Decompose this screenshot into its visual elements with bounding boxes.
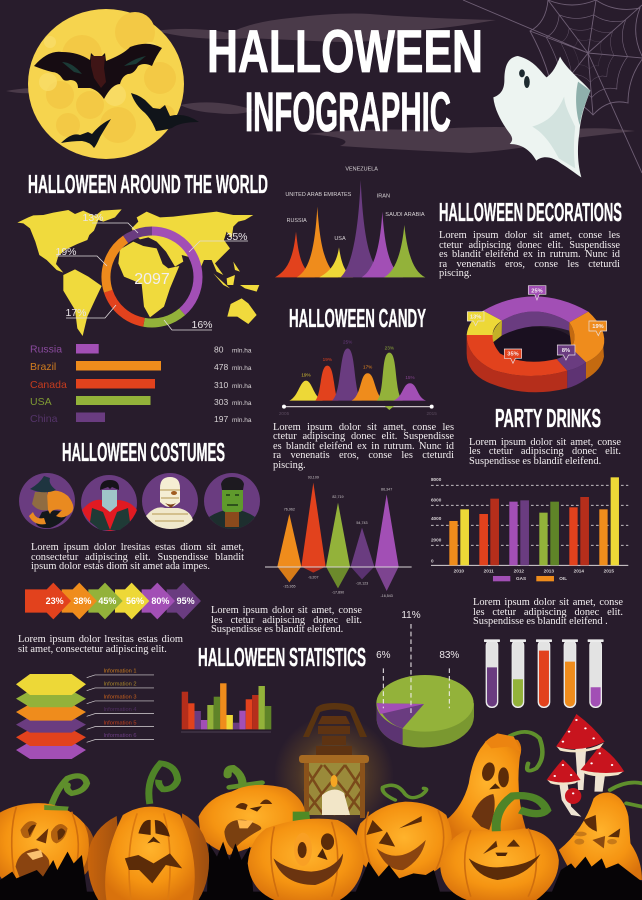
axis labels: 4000 — [431, 516, 442, 521]
icon: vampire — [81, 475, 137, 531]
spider web — [463, 0, 642, 173]
text: decorations: Lorem ipsum dolor sit amet, conse les — [439, 230, 620, 241]
text: candy: ctetur adipiscing donec elit. Suspendisse — [273, 431, 454, 442]
icon: frankenstein — [204, 473, 260, 529]
axis labels: GAS — [516, 576, 526, 581]
country labels: SAUDI ARABIA — [385, 212, 425, 218]
text: ribbon note: Lorem ipsum dolor lresitas estas diom — [18, 634, 183, 645]
text: tubes: Lorem ipsum dolor sit amet, conse — [473, 597, 623, 608]
ribbon percent labels: 80% — [151, 596, 170, 606]
pumpkin: left front — [88, 763, 209, 900]
pumpkin: rear right — [356, 802, 452, 882]
black grass — [0, 842, 642, 900]
diamond values: 76,962 — [284, 507, 295, 511]
row: Canada: Canada — [30, 379, 67, 391]
axis labels: 2013 — [544, 568, 554, 573]
text: costumes: consectetur adipiscing elit. Suspendisse blandit — [31, 552, 244, 562]
background clouds — [6, 14, 635, 153]
row: USA — [30, 396, 252, 408]
value labels — [279, 340, 437, 416]
diamond values — [283, 476, 393, 598]
map — [17, 209, 259, 336]
3D donut chart — [467, 286, 607, 392]
callouts — [467, 286, 607, 363]
row: Brazil: Brazil — [30, 361, 56, 373]
pie labels — [376, 610, 459, 661]
text: decorations: piscing. — [439, 268, 472, 279]
axis labels: OIL — [559, 576, 567, 581]
country labels: IRAN — [377, 193, 390, 199]
ring segments — [87, 212, 217, 342]
text: statistics: Suspendisse es blandit eleifend. — [211, 624, 343, 635]
lantern glow — [274, 715, 394, 835]
axis — [282, 405, 434, 410]
icon: mummy — [142, 473, 198, 529]
title: INFOGRAPHIC — [245, 80, 451, 143]
info labels — [103, 668, 136, 739]
row: USA: mln.ha — [232, 400, 252, 407]
row: China — [30, 412, 252, 425]
diamond values: -10,123 — [356, 581, 368, 585]
pumpkin: right front — [440, 796, 559, 900]
icon: witch — [19, 473, 75, 529]
heading: candy: HALLOWEEN CANDY — [289, 303, 426, 333]
percent labels: 35% — [226, 231, 248, 243]
callouts: 25% — [531, 288, 543, 294]
tube 4 — [562, 639, 578, 708]
axis labels: 2014 — [574, 568, 584, 573]
ribbon percent labels: 95% — [177, 596, 195, 606]
title — [207, 18, 483, 143]
text: candy: piscing. — [273, 460, 306, 470]
row: Canada: 310 — [214, 380, 228, 390]
costume circles — [19, 473, 260, 531]
statistics bars — [181, 683, 271, 732]
text: candy: es blandit eleifend ex in rutrum. Nunc id — [273, 440, 454, 452]
tube 1 — [484, 639, 500, 708]
text: party drinks: Lorem ipsum dolor sit amet, conse — [469, 436, 621, 448]
icon: left small bat — [61, 119, 111, 148]
legend — [493, 576, 554, 581]
bell chart: candy — [279, 340, 437, 416]
row: Russia: Russia — [30, 344, 62, 356]
diamond values: -9,207 — [308, 575, 319, 579]
leader lines — [56, 223, 248, 330]
icon: large bat — [34, 44, 162, 99]
row: Brazil: 478 — [214, 362, 228, 372]
ribbon percent labels: 56% — [126, 596, 145, 606]
pie labels: 83% — [439, 650, 459, 661]
text: statistics: les ctetur adipiscing donec elit. — [211, 614, 362, 626]
3D pie chart — [376, 610, 474, 747]
row: USA: USA — [30, 396, 52, 408]
country bars — [30, 344, 252, 425]
text: candy — [273, 422, 454, 470]
value labels: 25% — [343, 340, 352, 345]
country labels: VENEZUELA — [345, 167, 378, 173]
diamonds chart — [265, 476, 412, 598]
axis labels: 0 — [431, 558, 434, 563]
front pumpkins — [88, 763, 559, 900]
text: party drinks: les ctetur adipiscing donec elit. — [469, 446, 621, 457]
tube 2 — [510, 639, 526, 708]
axis labels: 2015 — [604, 568, 614, 573]
percent labels: 17% — [65, 307, 87, 319]
diamond values: -15,365 — [283, 584, 296, 588]
info labels: Information 5 — [103, 720, 136, 726]
icon: ghost — [493, 56, 590, 177]
country labels: UNITED ARAB EMIRATES — [285, 192, 352, 198]
axis labels: 6000 — [431, 498, 442, 503]
callouts: 13% — [470, 314, 481, 320]
stacked hexagon list — [16, 668, 154, 759]
diamond values: 54,743 — [356, 521, 368, 525]
percent labels: 19% — [55, 246, 77, 258]
value labels: 2015 — [426, 411, 437, 416]
row: Canada: mln.ha — [232, 383, 252, 390]
text: costumes — [31, 542, 244, 572]
text: tubes: les ctetur adipiscing donec elit. — [473, 606, 623, 618]
value labels: 15% — [405, 375, 415, 380]
text: candy: ra venenatis eros, conse les cteturdi — [273, 450, 454, 461]
axis labels: 2012 — [514, 568, 524, 573]
country labels: RUSSIA — [287, 218, 307, 224]
country labels: USA — [334, 236, 346, 242]
row: Canada — [30, 379, 252, 391]
value labels: 19% — [323, 357, 332, 362]
heading: around the world: HALLOWEEN AROUND THE WORLD — [28, 169, 268, 199]
row: China: mln.ha — [232, 417, 252, 424]
pumpkin: centre front — [248, 812, 364, 900]
percent labels: 13% — [82, 212, 104, 224]
callouts: 19% — [592, 324, 604, 330]
moon with bats — [28, 9, 199, 159]
heading: statistics: HALLOWEEN STATISTICS — [198, 642, 366, 672]
text: decorations — [439, 230, 620, 279]
text: decorations: ra venenatis eros, conse les cteturdi — [439, 258, 620, 270]
value labels: 2005 — [279, 411, 290, 416]
pie labels: 11% — [401, 610, 421, 621]
info labels: Information 2 — [103, 681, 136, 687]
row: China: 197 — [214, 414, 228, 424]
diamond values: 82,719 — [332, 495, 344, 499]
row: Russia: 80 — [214, 344, 224, 354]
info lines — [87, 675, 154, 742]
percent labels: 16% — [191, 319, 213, 331]
callouts: 35% — [507, 352, 519, 358]
pumpkin: left — [0, 803, 95, 887]
row: USA: 303 — [214, 397, 228, 407]
candle — [322, 789, 350, 815]
text: costumes: Lorem ipsum dolor lresitas estas diom sit amet, — [31, 542, 244, 553]
peaks chart: countries — [275, 167, 425, 277]
info labels: Information 1 — [103, 668, 136, 674]
axis labels — [431, 477, 614, 581]
ribbon percent labels — [46, 596, 195, 606]
row: Russia: mln.ha — [232, 348, 252, 354]
text: costumes: ipsum dolor estas diom sit amet ada impes. — [31, 561, 210, 572]
ribbon percent labels: 45% — [98, 596, 117, 606]
title: HALLOWEEN — [207, 18, 483, 85]
text: statistics: Lorem ipsum dolor sit amet, conse — [211, 605, 362, 616]
pumpkin: tall gourd — [446, 733, 526, 840]
drinks bar chart — [431, 477, 628, 581]
percent labels — [55, 212, 248, 331]
axis labels: 2010 — [454, 568, 464, 573]
info labels: Information 4 — [103, 707, 136, 713]
text: decorations: ctetur adipiscing donec elit. Suspendisse — [439, 240, 620, 250]
heading: costumes: HALLOWEEN COSTUMES — [62, 437, 225, 467]
test tubes — [484, 639, 604, 708]
diamond values: -16,543 — [380, 594, 393, 598]
axis labels: 2000 — [431, 538, 442, 543]
text: ribbon note: sit amet, consectetur adipiscing elit. — [18, 644, 167, 654]
info labels: Information 3 — [103, 694, 136, 700]
value labels: 19% — [301, 372, 311, 377]
text: party drinks — [469, 436, 621, 466]
ring total: 2097 — [134, 271, 170, 288]
callouts: 8% — [562, 348, 570, 354]
text: ribbon note — [18, 634, 183, 654]
text: tubes: Suspendisse es blandit eleifend . — [473, 616, 608, 627]
mushrooms — [547, 714, 624, 817]
value labels: 17% — [363, 365, 372, 370]
back pumpkins and mushrooms — [0, 714, 642, 887]
row: Russia — [30, 344, 252, 356]
country labels — [285, 167, 425, 242]
text: party drinks: Suspendisse es blandit eleifend. — [469, 456, 601, 466]
vine stems — [51, 732, 642, 807]
diamond values: 93,109 — [308, 476, 319, 480]
value labels: 23% — [385, 345, 394, 350]
icon: right small bat — [131, 93, 199, 131]
tube 5 — [588, 639, 604, 708]
diamond values: -17,890 — [332, 591, 344, 595]
row: Brazil: mln.ha — [232, 365, 252, 372]
ribbon percent labels: 23% — [46, 596, 64, 606]
diamond values: 86,347 — [381, 487, 392, 491]
text: candy: Lorem ipsum dolor sit amet, conse les — [273, 422, 454, 432]
arrow ribbon — [25, 583, 201, 619]
text: statistics — [211, 605, 362, 635]
world map with ring chart — [17, 209, 259, 342]
info labels: Information 6 — [103, 733, 136, 739]
lantern — [299, 703, 369, 818]
pie dashes — [383, 624, 449, 714]
pie labels: 6% — [376, 650, 391, 661]
ribbon percent labels: 38% — [73, 596, 92, 606]
row: China: China — [30, 413, 58, 425]
tube 3 — [536, 639, 552, 708]
row: Brazil — [30, 361, 252, 373]
pumpkin: right gourd — [559, 793, 642, 880]
axis labels: 2011 — [484, 568, 494, 573]
flame — [330, 775, 338, 787]
pumpkin: rear centre — [199, 785, 305, 855]
text: decorations: es blandit eleifend ex in rutrum. Nunc id — [439, 249, 620, 260]
axis labels: 8000 — [431, 477, 442, 482]
text: tubes — [473, 597, 623, 627]
